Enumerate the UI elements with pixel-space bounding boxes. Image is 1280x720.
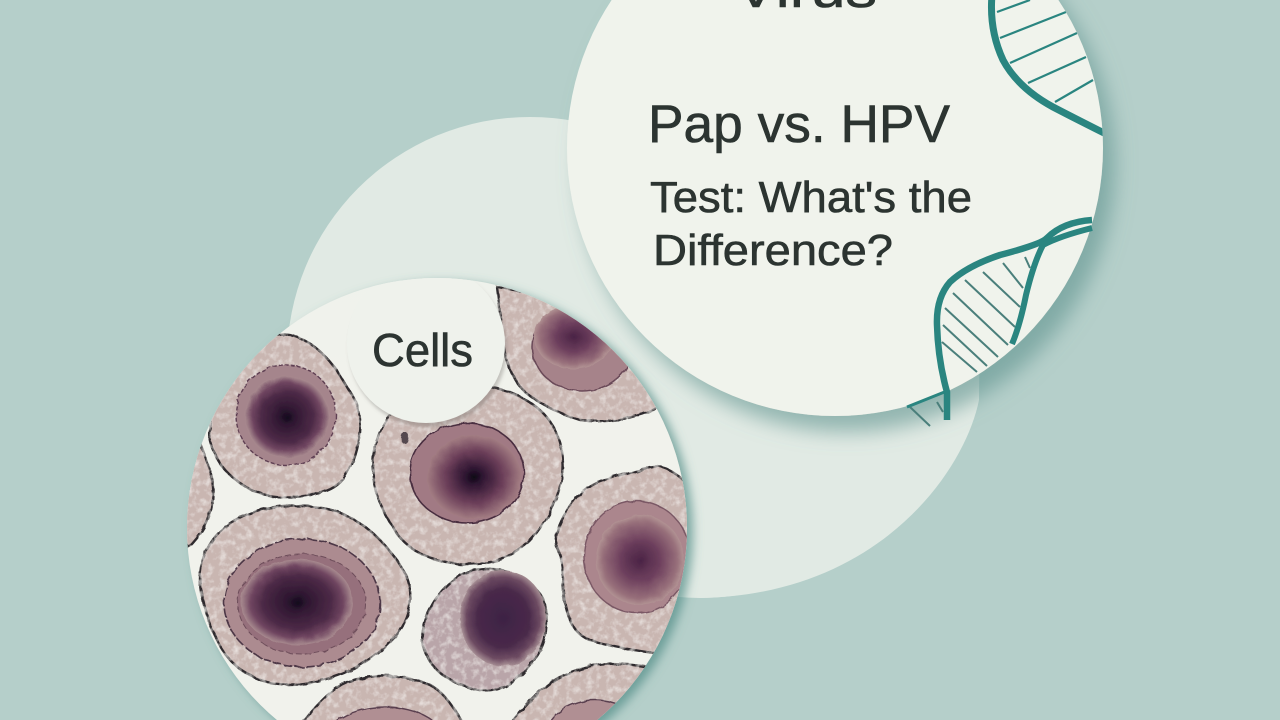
subtitle: Test: What's the Difference?: Difference?	[653, 226, 893, 275]
icon: DNA helix top right	[991, 0, 1106, 134]
panel: cells microscope circle	[170, 278, 700, 720]
subtitle: Test: What's the Difference?: Test: What's the	[650, 173, 972, 222]
label: Cells: Cells	[372, 324, 473, 376]
icon: DNA helix bottom right	[907, 220, 1092, 426]
infographic canvas	[187, 0, 1124, 720]
title: Pap vs. HPV: Pap vs. HPV	[648, 95, 951, 154]
panel: cells label circle	[348, 294, 508, 428]
pale backdrop shape	[287, 98, 980, 603]
subtitle: Test: What's the Difference?	[650, 173, 972, 275]
panel: virus title circle	[567, 0, 1106, 426]
cell illustrations	[170, 287, 700, 720]
